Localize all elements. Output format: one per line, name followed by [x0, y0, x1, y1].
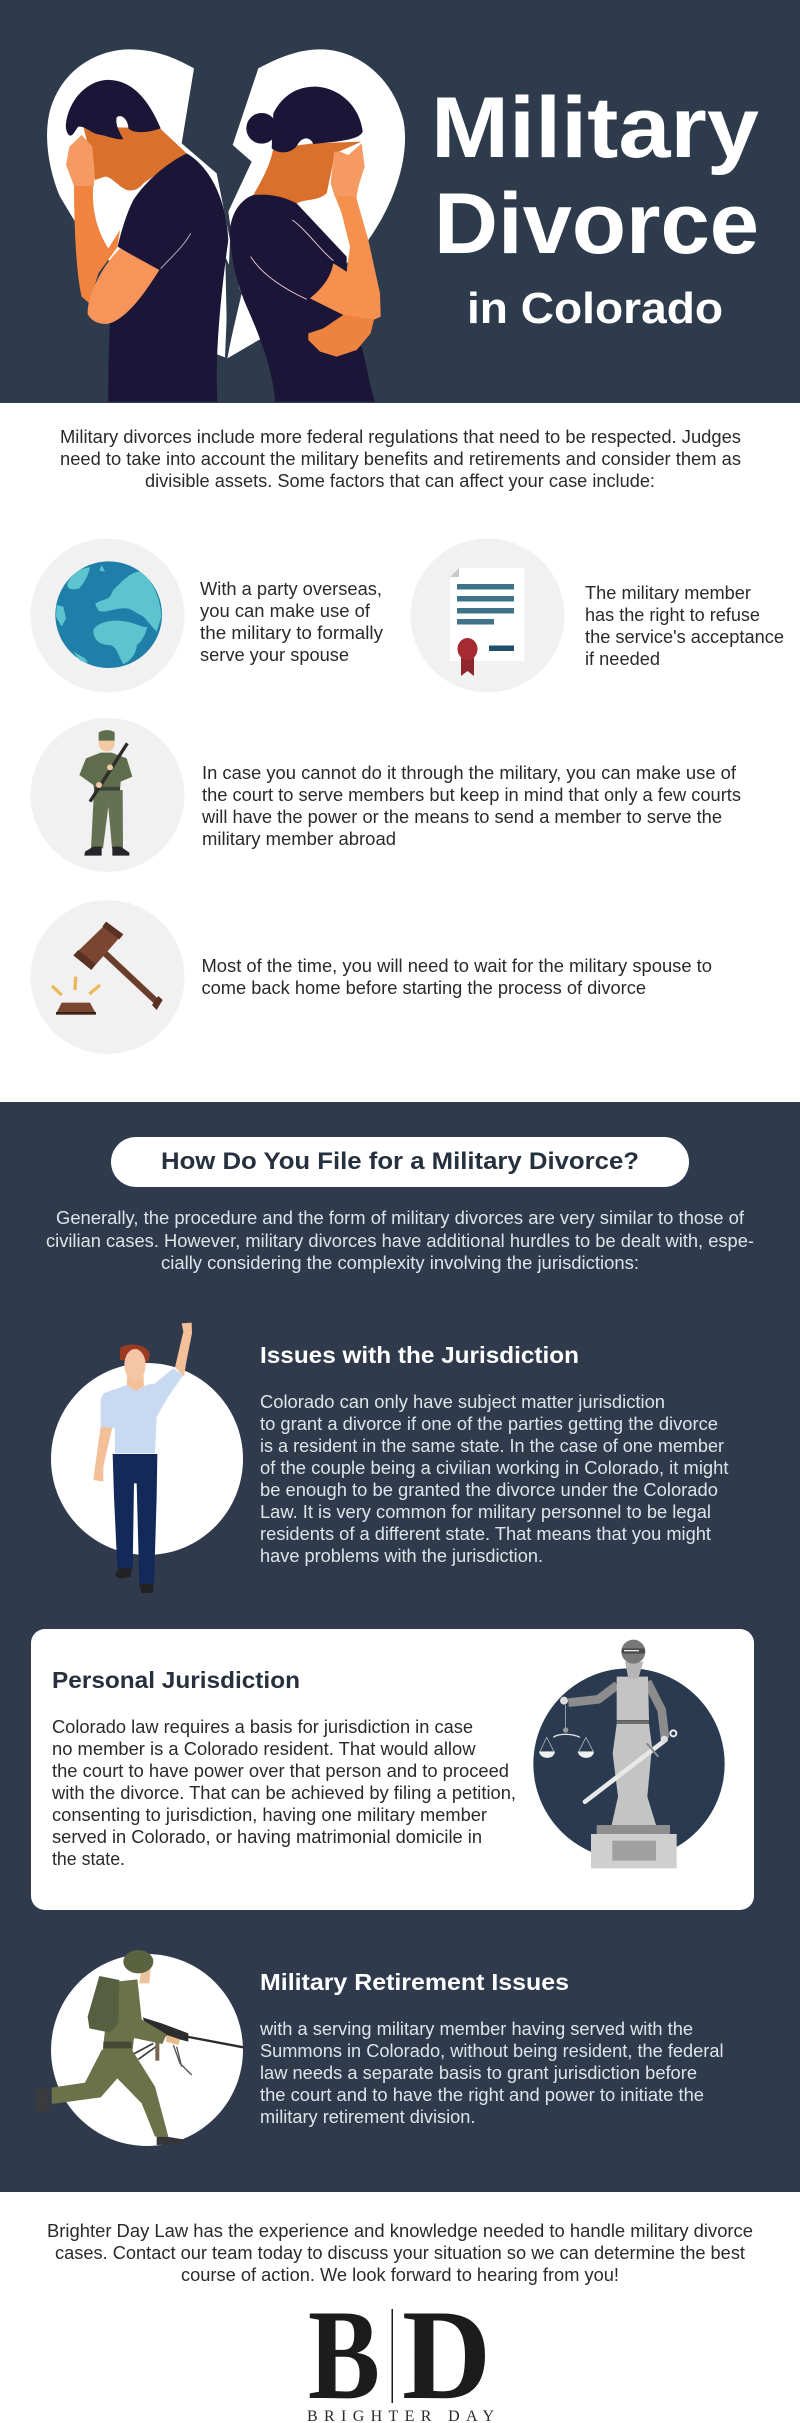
- icon: document with seal: [450, 568, 524, 676]
- text: the military to formally: [200, 623, 383, 643]
- text: with the divorce. That can be achieved by filing a petition,: [51, 1783, 516, 1803]
- title: [431, 80, 759, 333]
- logo: Brighter Day: B: [308, 2283, 380, 2423]
- logo: Brighter Day: D: [402, 2283, 491, 2423]
- text: law needs a separate basis to grant jurisdiction before: [260, 2063, 697, 2083]
- icon: running soldier: [35, 1950, 243, 2145]
- text: the court to serve members but keep in mind that only a few courts: [202, 785, 741, 805]
- text: the court and to have the right and power to initiate the: [260, 2085, 704, 2105]
- text: [51, 1717, 516, 1869]
- text: In case you cannot do it through the military, you can make use of: [202, 763, 737, 783]
- panel: factor court service: [30, 718, 741, 872]
- text: Law. It is very common for military personnel to be legal: [260, 1502, 711, 1522]
- text: military member abroad: [202, 829, 396, 849]
- text block: intro: Military divorces include more federal regulations that need to be respected. Judges: [60, 427, 741, 447]
- text: Summons in Colorado, without being resident, the federal: [260, 2041, 724, 2061]
- text: [259, 2019, 724, 2127]
- text: [200, 579, 383, 665]
- text block: closing: [47, 2221, 753, 2285]
- icon: gavel: [52, 922, 163, 1015]
- panel: header: [0, 0, 800, 403]
- text: [260, 1392, 728, 1566]
- text: the state.: [52, 1849, 125, 1869]
- heading: Issues with the Jurisdiction: [260, 1342, 579, 1368]
- text block: closing: cases. Contact our team today to discuss your situation so we can determine the best: [55, 2243, 745, 2263]
- text: no member is a Colorado resident. That would allow: [52, 1739, 477, 1759]
- text: the court to have power over that person and to proceed: [52, 1761, 509, 1781]
- text: come back home before starting the process of divorce: [202, 978, 646, 998]
- icon: lady justice statue: [533, 1640, 725, 1868]
- illustration: couple back to back with broken heart: [47, 49, 405, 402]
- text: to grant a divorce if one of the parties getting the divorce: [260, 1414, 718, 1434]
- text: has the right to refuse: [585, 605, 760, 625]
- text: served in Colorado, or having matrimonial domicile in: [52, 1827, 482, 1847]
- subsection: military retirement issues: [35, 1950, 724, 2146]
- text: have problems with the jurisdiction.: [260, 1546, 543, 1566]
- text: Colorado law requires a basis for jurisdiction in case: [52, 1717, 473, 1737]
- text: if needed: [585, 649, 660, 669]
- text: Most of the time, you will need to wait for the military spouse to: [202, 956, 712, 976]
- text: you can make use of: [200, 601, 371, 621]
- title: Divorce: [434, 176, 759, 272]
- text block: intro: need to take into account the military benefits and retirements and consider them as: [60, 449, 741, 469]
- title: Military: [431, 80, 759, 176]
- icon: broken heart right half: [227, 49, 405, 358]
- panel: factor overseas: [30, 538, 383, 692]
- panel: how do you file section: [0, 1102, 800, 2192]
- panel: factor refuse acceptance: [410, 538, 784, 692]
- panel: factor wait for spouse: [30, 900, 712, 1054]
- heading: Personal Jurisdiction: [52, 1667, 300, 1693]
- text block: section intro: [46, 1208, 754, 1273]
- heading: Military Retirement Issues: [260, 1969, 569, 1995]
- figure: woman: [230, 87, 381, 402]
- subsection: issues with the jurisdiction: [51, 1323, 728, 1593]
- text: serve your spouse: [200, 645, 349, 665]
- text: military retirement division.: [260, 2107, 476, 2127]
- text block: closing: Brighter Day Law has the experience and knowledge needed to handle military divorce: [47, 2221, 753, 2241]
- panel: personal jurisdiction: [31, 1629, 754, 1910]
- text block: section intro: Generally, the procedure and the form of military divorces are very similar to those of: [56, 1208, 745, 1228]
- text: Colorado can only have subject matter jurisdiction: [260, 1392, 665, 1412]
- title: in Colorado: [467, 284, 723, 333]
- text block: intro: divisible assets. Some factors that can affect your case include:: [145, 471, 655, 491]
- text block: section intro: civilian cases. However, military divorces have additional hurdles to be dealt with, espe-: [46, 1231, 754, 1251]
- icon: globe: [55, 561, 162, 668]
- text: [201, 763, 741, 849]
- heading pill: [111, 1137, 689, 1187]
- text: residents of a different state. That means that you might: [260, 1524, 711, 1544]
- icon: man raising arm: [93, 1323, 192, 1593]
- text: will have the power or the means to send a member to serve the: [201, 807, 722, 827]
- text: With a party overseas,: [200, 579, 382, 599]
- text: the service's acceptance: [585, 627, 784, 647]
- text block: intro: [60, 427, 741, 491]
- text: [585, 583, 784, 669]
- icon: broken heart left half: [47, 49, 230, 357]
- text: consenting to jurisdiction, having one military member: [52, 1805, 487, 1825]
- figure: man: [66, 80, 228, 402]
- logo: Brighter Day: [307, 2283, 494, 2423]
- text: of the couple being a civilian working in Colorado, it might: [260, 1458, 728, 1478]
- text: [202, 956, 712, 998]
- icon: standing soldier: [79, 730, 132, 856]
- text block: section intro: cially considering the complexity involving the jurisdictions:: [161, 1253, 639, 1273]
- text: with a serving military member having served with the: [259, 2019, 693, 2039]
- text: be enough to be granted the divorce under the Colorado: [260, 1480, 718, 1500]
- dark crack: [225, 257, 242, 355]
- text block: closing: course of action. We look forward to hearing from you!: [181, 2265, 619, 2285]
- text: is a resident in the same state. In the case of one member: [260, 1436, 724, 1456]
- heading pill: How Do You File for a Military Divorce?: [161, 1148, 639, 1175]
- text: The military member: [585, 583, 751, 603]
